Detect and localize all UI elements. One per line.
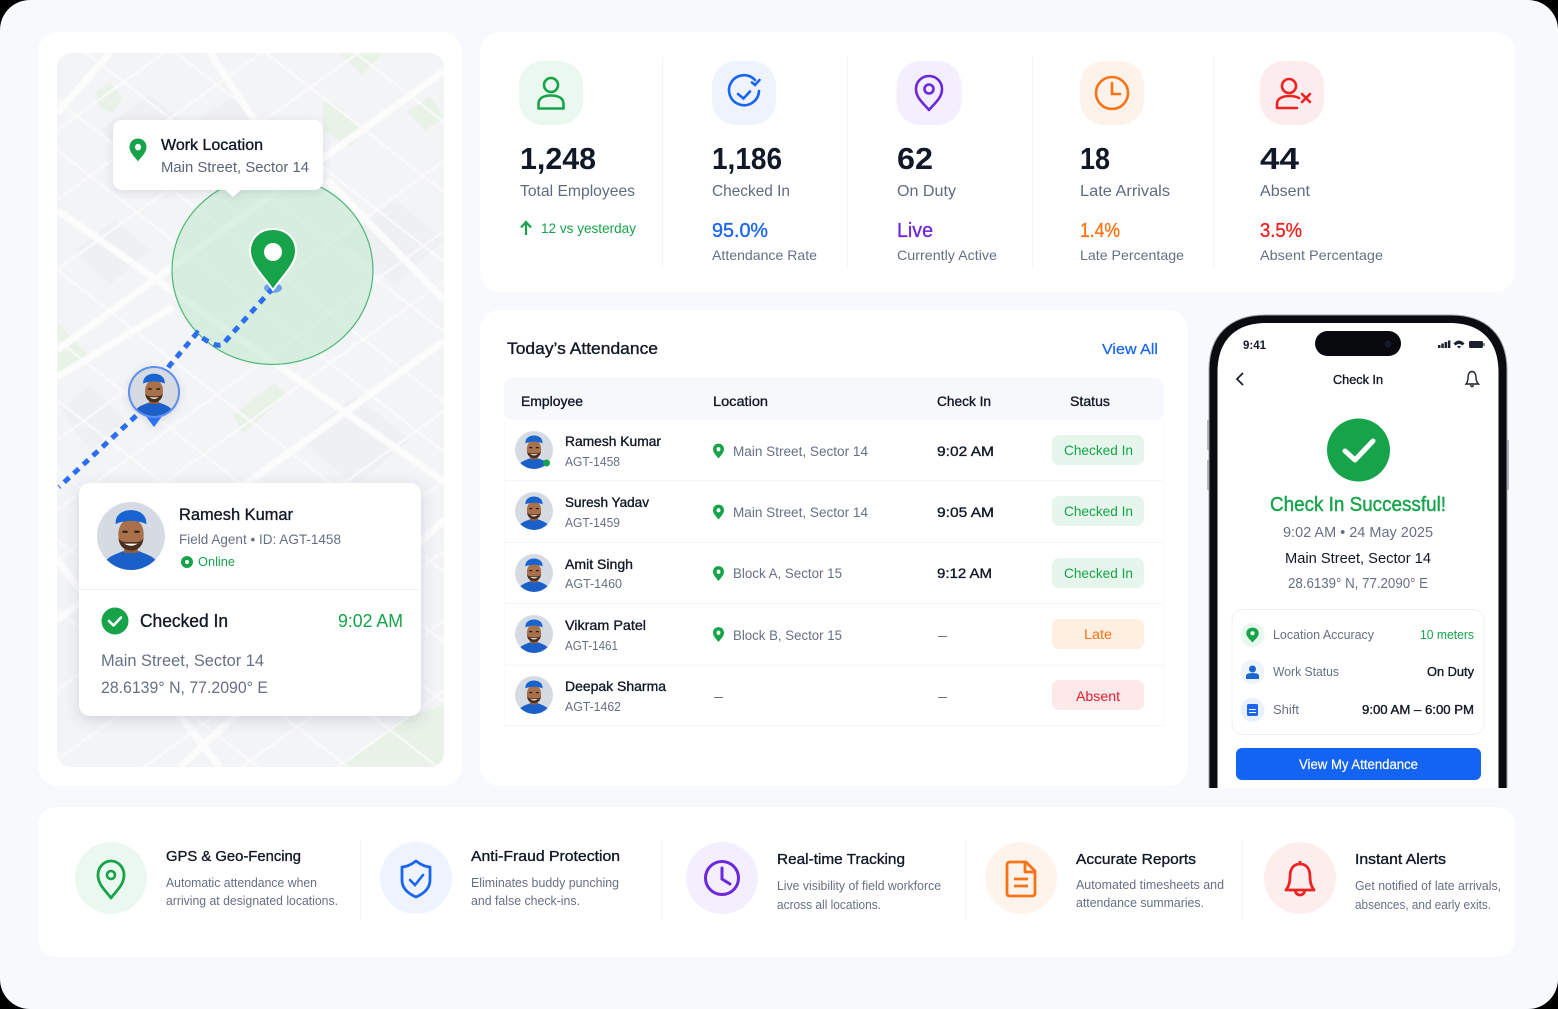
view attendance button: View My Attendance — [1299, 757, 1418, 772]
agent card: Checked In — [140, 611, 228, 631]
row: Ramesh Kumar: Ramesh Kumar — [565, 433, 661, 449]
row: Deepak Sharma — [515, 676, 1144, 714]
feature: real-time tracking — [686, 842, 941, 914]
success text: Main Street, Sector 14 — [1285, 550, 1431, 567]
stat: late arrivals: Late Percentage — [1080, 247, 1184, 263]
row: Vikram Patel: – — [938, 627, 947, 643]
stat: checked in: Checked In — [712, 183, 790, 200]
stat: checked in: Attendance Rate — [712, 247, 817, 263]
row: Amit Singh: Checked In — [1064, 565, 1133, 581]
feature: GPS: GPS & Geo-Fencing — [166, 848, 301, 865]
stat: late arrivals: Late Arrivals — [1080, 183, 1170, 200]
agent card: Ramesh Kumar — [179, 505, 293, 524]
stat: on duty — [896, 61, 997, 263]
feature: anti-fraud — [380, 842, 620, 914]
feature: GPS: Automatic attendance when — [166, 876, 317, 890]
stat: late arrivals: 1.4% — [1080, 220, 1120, 242]
location pin — [250, 229, 296, 293]
stat: absent: Absent Percentage — [1260, 247, 1383, 263]
stat: on duty: 62 — [897, 141, 933, 176]
feature: GPS — [75, 842, 338, 914]
agent card — [79, 483, 421, 716]
table header: Employee — [521, 393, 583, 409]
row: Vikram Patel: Vikram Patel — [565, 617, 646, 633]
callout: work location: Work Location — [161, 137, 263, 154]
panel: today's attendance — [480, 310, 1188, 786]
feature: instant alerts — [1264, 842, 1501, 914]
details box: Location Accuracy — [1273, 628, 1375, 642]
row: Suresh Yadav: Checked In — [1064, 503, 1133, 519]
details box: 10 meters — [1420, 628, 1474, 642]
success text: 9:02 AM • 24 May 2025 — [1283, 525, 1433, 541]
feature: accurate reports: Automated timesheets and — [1076, 878, 1224, 892]
row: Amit Singh — [515, 554, 1144, 592]
row: Ramesh Kumar: Main Street, Sector 14 — [733, 444, 868, 459]
phone nav bar: Check In — [1333, 372, 1383, 387]
stat: late arrivals: 18 — [1080, 141, 1110, 176]
feature: instant alerts: Get notified of late arrivals, — [1355, 879, 1501, 893]
feature: instant alerts: absences, and early exits. — [1355, 898, 1491, 912]
feature: accurate reports — [985, 842, 1224, 914]
success text — [1270, 494, 1446, 592]
row: Suresh Yadav: Suresh Yadav — [565, 494, 649, 510]
details box — [1232, 610, 1484, 734]
success text: 28.6139° N, 77.2090° E — [1288, 576, 1428, 592]
row: Ramesh Kumar: 9:02 AM — [937, 443, 994, 459]
agent card: Online — [198, 554, 235, 569]
table header — [504, 378, 1164, 420]
feature: instant alerts: Instant Alerts — [1355, 851, 1446, 868]
row: Amit Singh: 9:12 AM — [937, 565, 992, 581]
table heading: Today’s Attendance — [507, 339, 658, 358]
row: Deepak Sharma: AGT-1462 — [565, 699, 621, 714]
agent marker — [128, 366, 180, 427]
feature: anti-fraud: Anti-Fraud Protection — [471, 848, 620, 865]
feature: accurate reports: attendance summaries. — [1076, 896, 1204, 910]
row: Amit Singh: Amit Singh — [565, 556, 633, 572]
stat: checked in — [712, 61, 817, 263]
stat: total employees: Total Employees — [520, 183, 635, 200]
row: Suresh Yadav: 9:05 AM — [937, 504, 994, 520]
row: Vikram Patel: Block B, Sector 15 — [733, 628, 842, 643]
feature: anti-fraud: and false check-ins. — [471, 894, 580, 908]
stat: late arrivals — [1080, 61, 1184, 263]
row: Ramesh Kumar: Checked In — [1064, 442, 1133, 458]
view attendance button — [1236, 748, 1481, 780]
agent card: Main Street, Sector 14 — [101, 651, 264, 670]
row: Vikram Patel — [515, 615, 1144, 653]
panel: features — [38, 807, 1515, 957]
row: Suresh Yadav — [515, 492, 1144, 530]
row: Deepak Sharma: – — [938, 688, 947, 704]
stat: absent: Absent — [1260, 183, 1311, 200]
row: Deepak Sharma: Absent — [1076, 688, 1120, 704]
feature: accurate reports: Accurate Reports — [1076, 851, 1196, 868]
feature: real-time tracking: Live visibility of field workforce — [777, 879, 941, 893]
view all link: View All — [1102, 341, 1158, 358]
agent card: 9:02 AM — [338, 611, 403, 631]
route dotted line — [59, 288, 273, 487]
details box: 9:00 AM – 6:00 PM — [1362, 703, 1474, 717]
details box: Shift — [1273, 703, 1300, 717]
row: Vikram Patel: AGT-1461 — [565, 638, 618, 653]
details box: On Duty — [1427, 665, 1475, 679]
stat: absent: 3.5% — [1260, 220, 1302, 242]
row: Amit Singh: AGT-1460 — [565, 576, 622, 591]
agent card: Field Agent • ID: AGT-1458 — [179, 531, 341, 547]
row: Suresh Yadav: AGT-1459 — [565, 515, 620, 530]
panel: stats — [480, 32, 1515, 292]
table header: Status — [1070, 393, 1110, 409]
feature: real-time tracking: Real-time Tracking — [777, 851, 905, 868]
phone status bar — [1243, 331, 1484, 356]
stat: absent — [1260, 61, 1383, 263]
row: Ramesh Kumar: AGT-1458 — [565, 454, 620, 469]
agent card: 28.6139° N, 77.2090° E — [101, 678, 268, 697]
map — [57, 53, 444, 767]
row: Deepak Sharma: – — [714, 688, 723, 704]
stat: total employees: 1,248 — [520, 141, 596, 176]
row: Suresh Yadav: Main Street, Sector 14 — [733, 505, 868, 520]
stat: checked in: 95.0% — [712, 220, 768, 242]
stat: absent: 44 — [1260, 141, 1300, 176]
row: Deepak Sharma: Deepak Sharma — [565, 678, 666, 694]
stat: checked in: 1,186 — [712, 141, 782, 176]
geofence circle — [172, 176, 373, 364]
phone nav bar — [1237, 372, 1478, 387]
table header: Check In — [937, 393, 991, 409]
details box: Work Status — [1273, 665, 1339, 679]
success text: Check In Successful! — [1270, 494, 1446, 516]
stat: on duty: Live — [897, 220, 933, 242]
table header: Location — [713, 393, 768, 409]
stat: on duty: On Duty — [897, 183, 956, 200]
feature: anti-fraud: Eliminates buddy punching — [471, 876, 619, 890]
callout: work location — [113, 120, 323, 197]
panel: map and agent — [57, 53, 444, 767]
row: Ramesh Kumar — [515, 431, 1144, 469]
feature: GPS: arriving at designated locations. — [166, 894, 338, 908]
check success icon — [1327, 418, 1390, 482]
stat: on duty: Currently Active — [897, 247, 997, 263]
row: Vikram Patel: Late — [1084, 626, 1112, 642]
stat: total employees: 12 vs yesterday — [541, 221, 636, 236]
callout: work location: Main Street, Sector 14 — [161, 159, 309, 176]
phone status bar: 9:41 — [1243, 340, 1267, 352]
row: Amit Singh: Block A, Sector 15 — [733, 566, 842, 581]
phone mockup — [1207, 315, 1509, 820]
stat: total employees — [519, 61, 636, 236]
feature: real-time tracking: across all locations. — [777, 898, 881, 912]
